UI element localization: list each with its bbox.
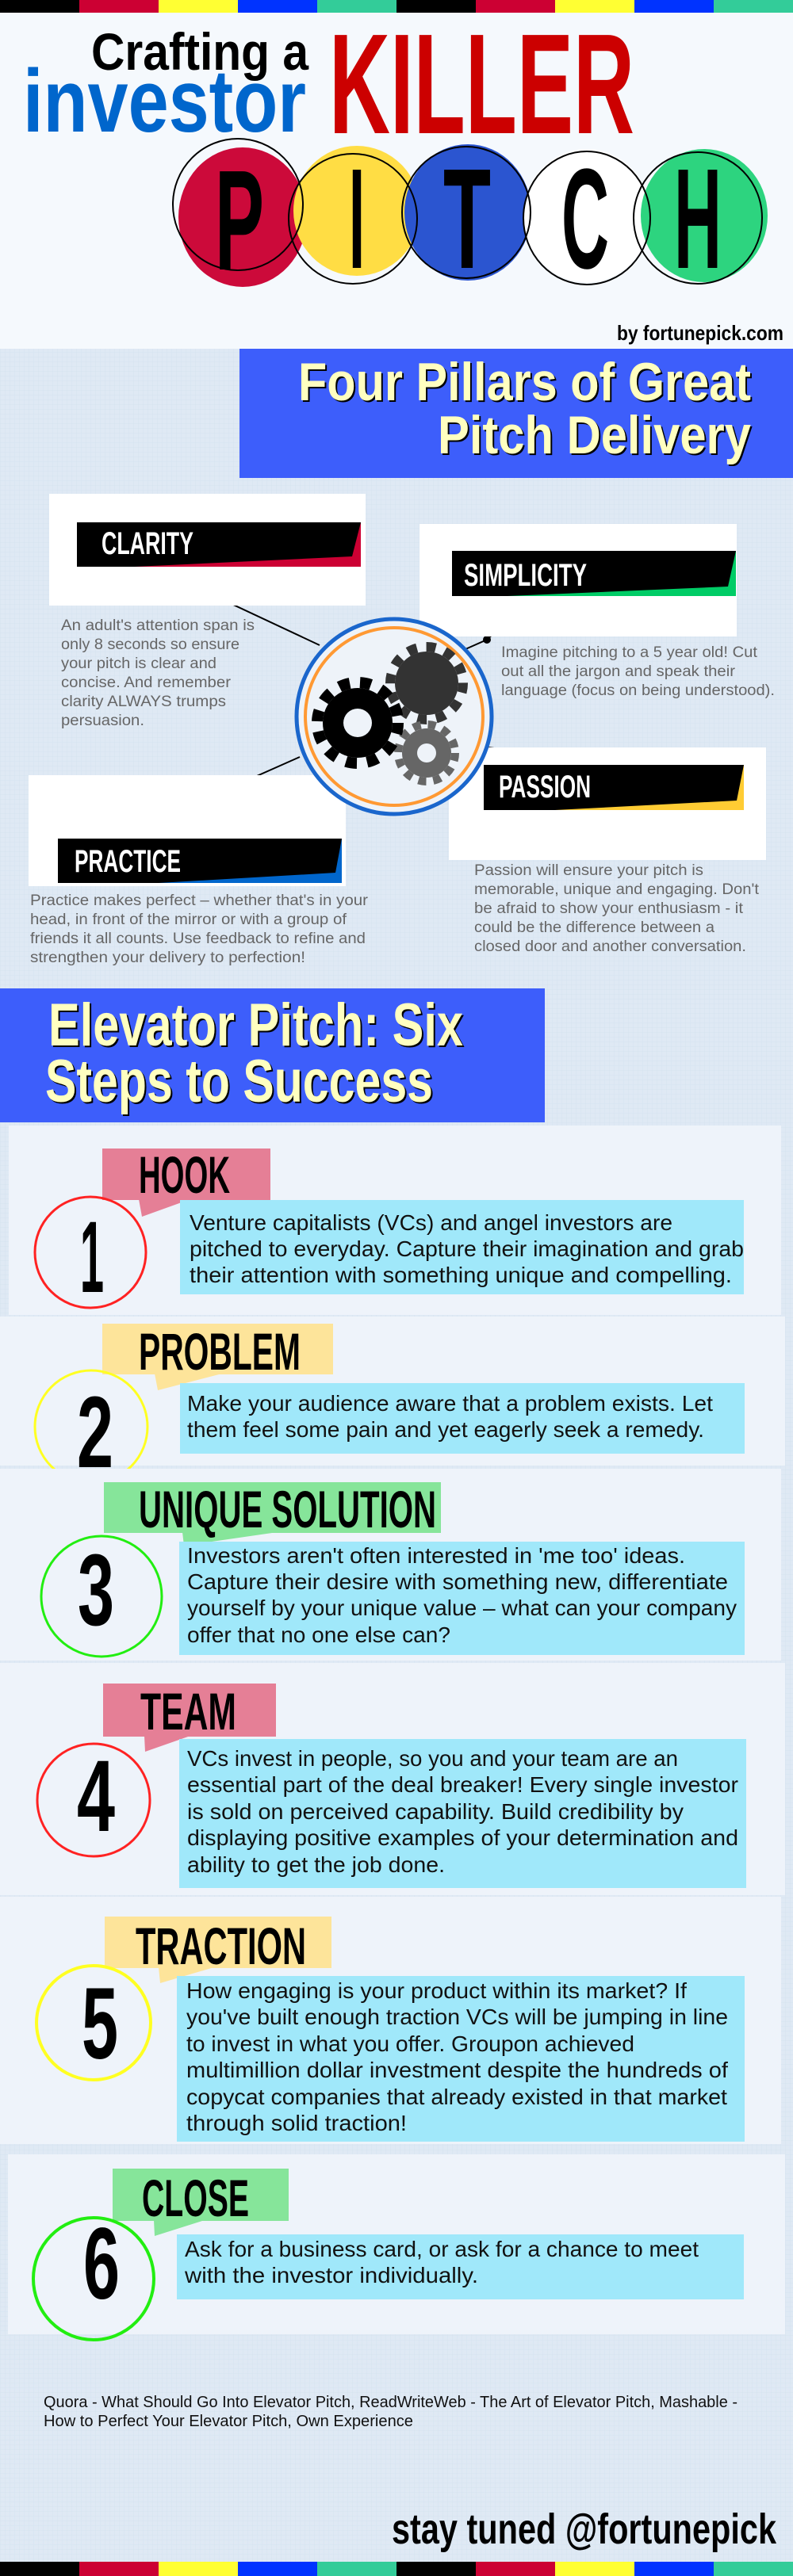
step 2: problem: PROBLEM	[139, 1322, 301, 1381]
heading: four pillars	[239, 349, 793, 478]
step 3: unique solution: Capture their desire with something new, differentiate	[187, 1569, 728, 1594]
panel: clarity: An adult's attention span is	[61, 617, 255, 634]
panel: practice: head, in front of the mirror or with a group of	[30, 912, 347, 928]
icon: gears circle	[297, 619, 492, 814]
panel: practice: friends it all counts. Use feedback to refine and	[30, 931, 366, 947]
panel: practice: Practice makes perfect – whether that's in your	[30, 892, 369, 909]
step 4: team: 4	[77, 1740, 115, 1853]
step 5: traction: How engaging is your product within its market? If	[186, 1978, 687, 2003]
panel: simplicity: out all the jargon and speak their	[501, 663, 736, 680]
step 4: team: ability to get the job done.	[187, 1852, 445, 1877]
panel: practice: strengthen your delivery to perfection!	[30, 950, 305, 966]
title: Crafting a	[91, 22, 309, 81]
panel: practice	[29, 775, 369, 966]
panel: simplicity: language (focus on being understood).	[501, 682, 775, 699]
step 2: problem: 2	[77, 1376, 113, 1489]
heading: elevator pitch: Elevator Pitch: Six	[48, 992, 463, 1059]
step 5: traction: multimillion dollar investment despite the hundreds of	[186, 2058, 728, 2082]
heading: four pillars: Pitch Delivery	[439, 407, 753, 467]
panel: simplicity: Imagine pitching to a 5 year old! Cut	[501, 644, 758, 661]
connector lines	[172, 567, 572, 839]
panel: clarity: only 8 seconds so ensure	[61, 636, 239, 653]
heading: four pillars: Pitch Delivery	[438, 405, 751, 465]
step 6: close: with the investor individually.	[184, 2263, 478, 2287]
panel: passion: memorable, unique and engaging. Don't	[474, 881, 760, 898]
bottom color stripe	[0, 2562, 793, 2576]
panel: clarity: persuasion.	[61, 713, 144, 729]
step 2: problem: Make your audience aware that a problem exists. Let	[187, 1391, 713, 1416]
PITCH circles: P	[215, 141, 264, 300]
sources: Quora - What Should Go Into Elevator Pitch, ReadWriteWeb - The Art of Elevator Pitch, Mashable -	[44, 2394, 737, 2411]
panel: clarity	[49, 494, 366, 729]
step 5: traction	[0, 1897, 781, 2144]
PITCH circles	[173, 139, 768, 300]
panel: simplicity: SIMPLICITY	[464, 558, 587, 593]
step 3: unique solution: yourself by your unique value – what can your company	[187, 1596, 737, 1620]
PITCH circles: T	[443, 140, 491, 299]
step 4: team: displaying positive examples of your determination and	[187, 1825, 738, 1850]
step 6: close: CLOSE	[142, 2169, 249, 2227]
step 6: close	[8, 2154, 785, 2340]
PITCH circles: H	[674, 140, 722, 299]
step 3: unique solution	[0, 1469, 781, 1661]
step 6: close: 6	[83, 2207, 120, 2321]
step 1: hook: pitched to everyday. Capture their imagination and grab	[190, 1236, 744, 1261]
title	[23, 5, 634, 164]
panel: passion	[449, 747, 766, 955]
panel: passion: be afraid to show your enthusiasm - it	[474, 900, 744, 917]
panel: simplicity	[419, 524, 775, 699]
sources: How to Perfect Your Elevator Pitch, Own Experience	[44, 2413, 413, 2430]
panel: clarity: CLARITY	[102, 526, 193, 561]
step 1: hook: Venture capitalists (VCs) and angel investors are	[190, 1210, 672, 1235]
step 4: team: VCs invest in people, so you and your team are an	[187, 1746, 678, 1771]
heading: elevator pitch: Elevator Pitch: Six	[50, 993, 465, 1061]
title: investor	[23, 52, 306, 151]
PITCH circles: I	[349, 140, 365, 299]
step 5: traction: to invest in what you offer. Groupon achieved	[186, 2031, 634, 2056]
heading: elevator pitch: Steps to Success	[47, 1049, 435, 1117]
step 5: traction: copycat companies that already existed in that market	[186, 2085, 727, 2109]
panel: clarity: concise. And remember	[61, 675, 232, 691]
step 4: team	[0, 1663, 785, 1895]
step 1: hook: 1	[80, 1201, 104, 1314]
step 3: unique solution: Investors aren't often interested in 'me too' ideas.	[187, 1543, 685, 1568]
step 3: unique solution: offer that no one else can?	[187, 1622, 450, 1647]
step 6: close: Ask for a business card, or ask for a chance to meet	[185, 2237, 699, 2261]
panel: clarity: your pitch is clear and	[61, 655, 216, 672]
panel: passion: could be the difference between a	[474, 919, 714, 936]
panel: passion: PASSION	[499, 770, 591, 805]
step 5: traction: you've built enough traction VCs will be jumping in line	[186, 2005, 728, 2029]
step 5: traction: TRACTION	[136, 1917, 306, 1975]
step 2: problem	[0, 1317, 785, 1489]
step 4: team: TEAM	[140, 1682, 236, 1741]
step 2: problem: them feel some pain and yet eagerly seek a remedy.	[187, 1417, 704, 1442]
step 1: hook	[9, 1126, 781, 1315]
top color stripe	[0, 0, 793, 13]
panel: passion: closed door and another conversation.	[474, 938, 746, 955]
PITCH circles: C	[561, 140, 609, 299]
heading: elevator pitch: Steps to Success	[45, 1048, 433, 1115]
step 3: unique solution: UNIQUE SOLUTION	[139, 1480, 436, 1538]
panel: clarity: clarity ALWAYS trumps	[61, 694, 226, 710]
sources	[44, 2394, 737, 2430]
step 4: team: is sold on perceived capability. Build credibility by	[187, 1799, 684, 1824]
step 3: unique solution: 3	[78, 1534, 114, 1647]
step 5: traction: through solid traction!	[186, 2111, 407, 2135]
step 1: hook: their attention with something unique and compelling.	[190, 1263, 732, 1287]
step 1: hook: HOOK	[139, 1145, 230, 1204]
step 5: traction: 5	[82, 1967, 118, 2081]
step 4: team: essential part of the deal breaker! Every single investor	[187, 1772, 738, 1797]
panel: practice: PRACTICE	[75, 844, 181, 879]
heading: elevator pitch	[0, 988, 545, 1122]
panel: passion: Passion will ensure your pitch is	[474, 862, 703, 879]
